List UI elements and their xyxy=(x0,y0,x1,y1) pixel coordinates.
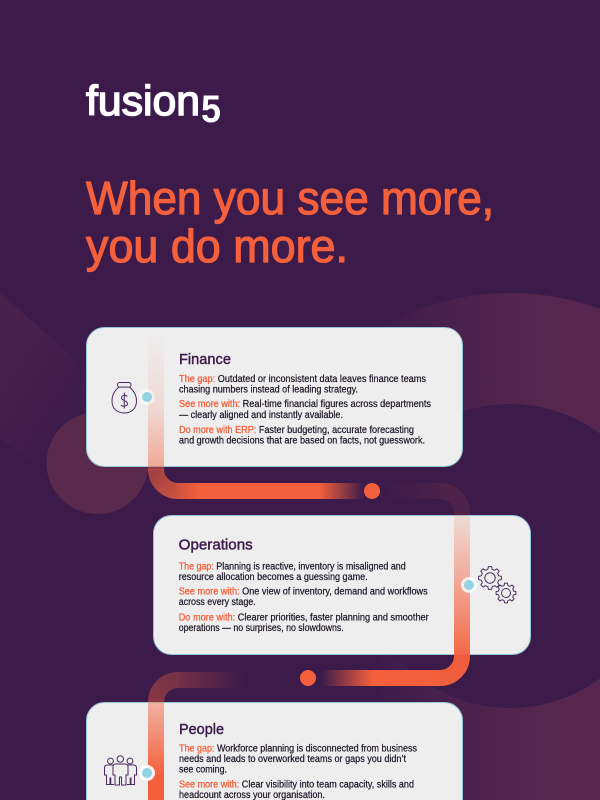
text: operations do more xyxy=(179,612,429,634)
text: operations see more: See more with: One view of inventory, demand and workflows xyxy=(179,586,428,598)
text: finance see more xyxy=(179,399,431,421)
dot: operations end xyxy=(300,670,316,686)
text: finance do more xyxy=(179,425,425,446)
text: operations gap xyxy=(179,562,406,583)
icon: gears xyxy=(479,567,516,603)
dot: finance end xyxy=(364,483,380,499)
node: operations xyxy=(461,577,477,593)
text: finance gap: chasing numbers instead of leading strategy. xyxy=(179,384,358,396)
text: operations see more: across every stage. xyxy=(179,597,256,608)
text: operations do more: Do more with: Clearer priorities, faster planning and smoother xyxy=(179,612,429,624)
connector: operations to people xyxy=(148,513,470,800)
heading: people: People xyxy=(179,721,224,738)
panel: finance xyxy=(86,328,462,466)
heading: finance: Finance xyxy=(179,351,231,368)
text: finance see more: See more with: Real-time financial figures across departments xyxy=(179,399,431,410)
text: operations gap: resource allocation becomes a guessing game. xyxy=(179,572,368,583)
background shape: right ring xyxy=(416,293,600,800)
title: When you see more, xyxy=(86,172,494,224)
icon: money bag xyxy=(112,382,136,413)
icon: people xyxy=(104,756,136,785)
text: people gap xyxy=(179,744,417,776)
text: people gap: needs and leads to overworked teams or gaps you didn’t xyxy=(179,754,406,765)
background shape: left diagonal band xyxy=(0,293,90,510)
card: people xyxy=(86,702,462,800)
panel: people xyxy=(86,702,462,800)
connector: finance to operations xyxy=(148,332,462,513)
text: operations do more: operations — no surprises, no slowdowns. xyxy=(179,623,344,634)
card: operations xyxy=(154,516,530,654)
text: people gap: see coming. xyxy=(179,764,227,776)
logo: 5 xyxy=(201,88,221,131)
text: operations see more xyxy=(179,586,428,608)
text: finance do more: and growth decisions that are based on facts, not guesswork. xyxy=(179,436,425,446)
logo: fusion xyxy=(86,77,200,124)
heading: operations: Operations xyxy=(179,536,253,554)
text: finance do more: Do more with ERP: Faster budgeting, accurate forecasting xyxy=(179,425,414,436)
card: finance xyxy=(86,328,462,466)
text: finance gap: The gap: Outdated or inconsistent data leaves finance teams xyxy=(179,374,426,385)
title xyxy=(86,172,494,272)
text: people see more xyxy=(179,780,414,800)
background shape: circle xyxy=(46,412,148,514)
title: you do more. xyxy=(86,220,348,272)
text: operations gap: The gap: Planning is reactive, inventory is misaligned and xyxy=(179,562,406,572)
node: finance xyxy=(139,389,155,405)
panel: operations xyxy=(154,516,530,654)
text: people gap: The gap: Workforce planning is disconnected from business xyxy=(179,744,417,754)
text: finance gap xyxy=(179,374,426,396)
text: finance see more: — clearly aligned and instantly available. xyxy=(179,410,343,421)
text: people see more: See more with: Clear visibility into team capacity, skills and xyxy=(179,780,414,790)
node: people xyxy=(139,765,155,781)
